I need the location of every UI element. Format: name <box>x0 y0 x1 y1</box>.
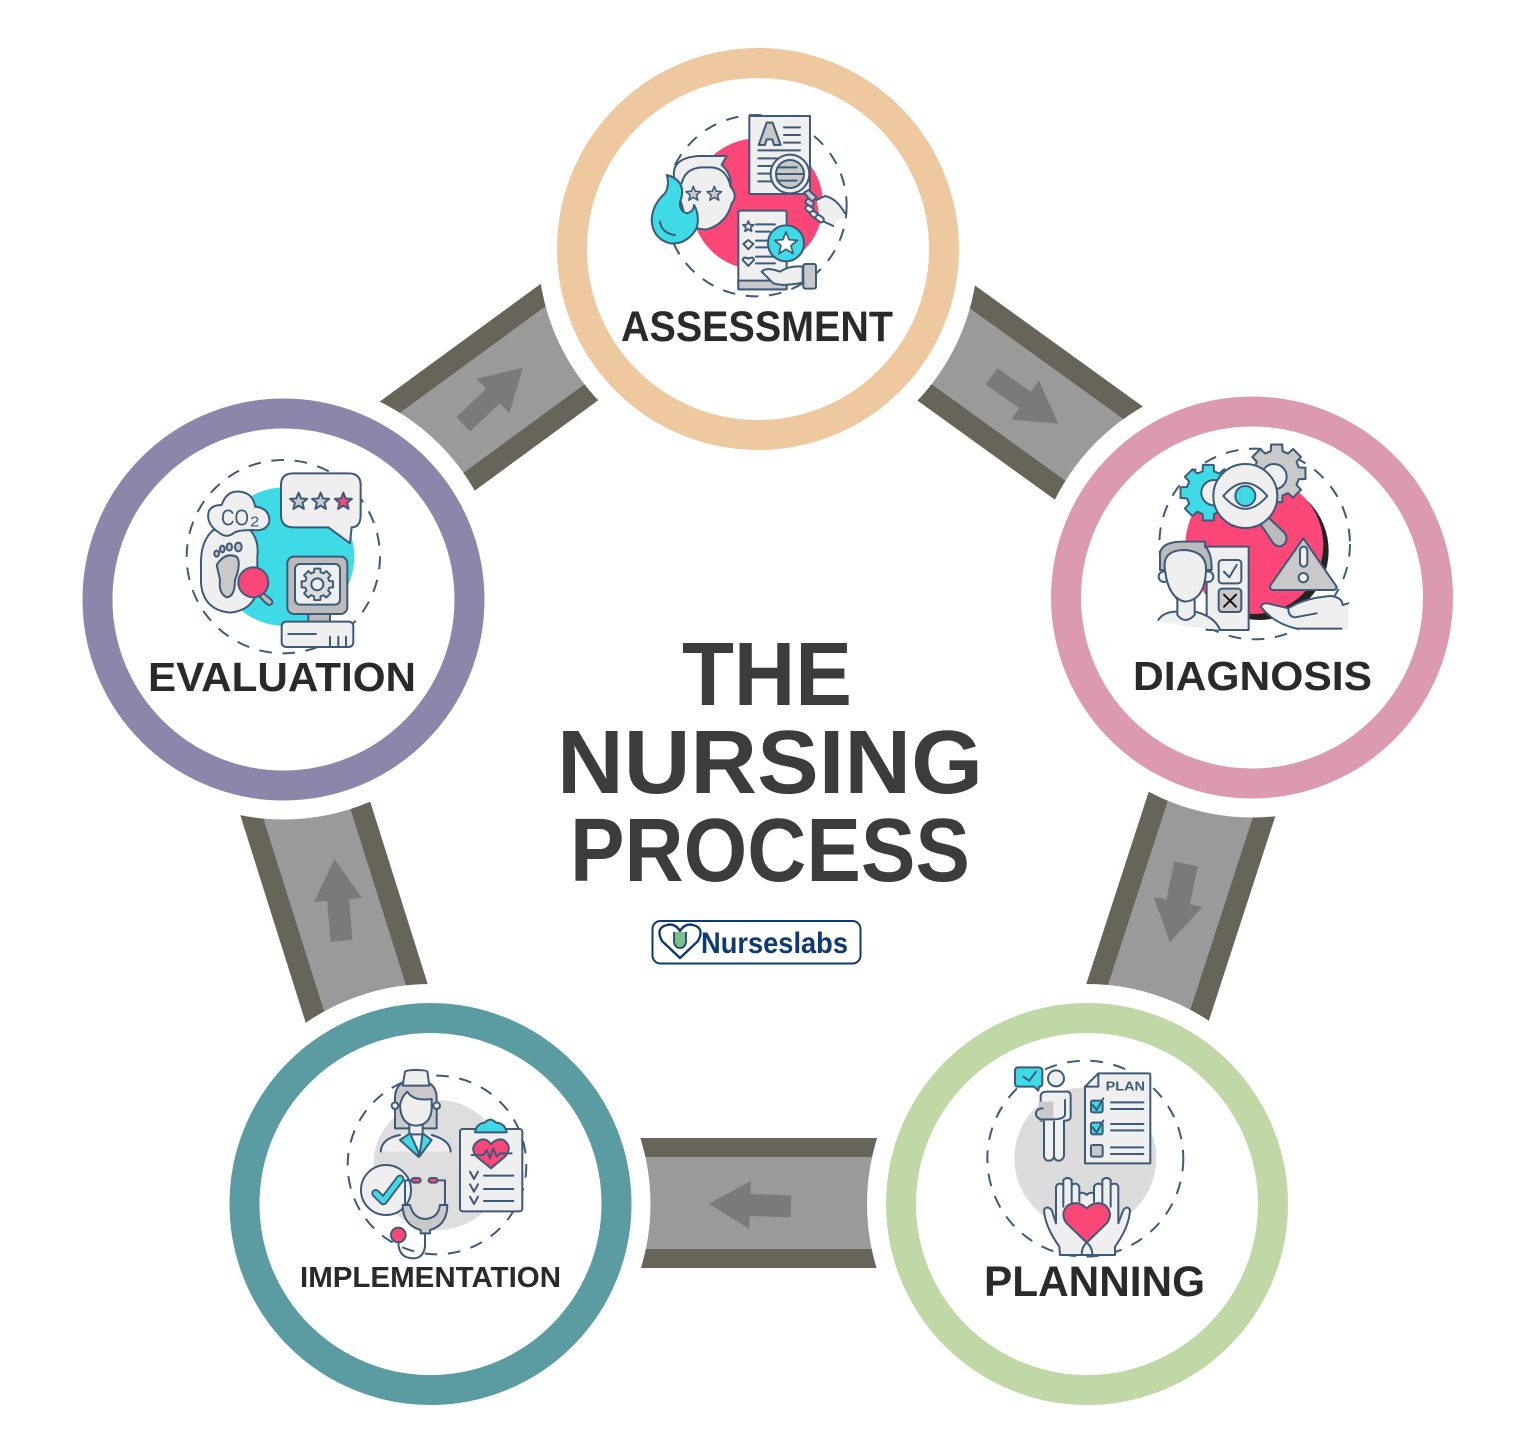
panel: implementation circle <box>210 984 650 1424</box>
panel: planning circle <box>867 984 1307 1424</box>
label: evaluation: EVALUATION <box>148 654 416 700</box>
icon: assessment <box>652 115 847 296</box>
title: PROCESS <box>570 801 970 901</box>
title: NURSING <box>557 713 983 813</box>
title <box>557 625 983 901</box>
logo: Nurseslabs <box>652 921 860 964</box>
icon: evaluation <box>187 460 380 653</box>
panel: assessment circle <box>538 29 978 469</box>
icon: diagnosis <box>1158 445 1350 639</box>
connector: evaluation to assessment <box>363 272 632 517</box>
icon: planning <box>987 1061 1183 1257</box>
title: THE <box>682 625 852 725</box>
connector: diagnosis to planning <box>1082 769 1278 1036</box>
connector: planning to implementation <box>639 1138 879 1268</box>
connector: implementation to evaluation <box>239 772 433 1040</box>
label: implementation: IMPLEMENTATION <box>300 1262 561 1294</box>
arrow: diagnosis to planning <box>1145 859 1211 947</box>
arrow: implementation to evaluation <box>311 857 365 943</box>
arrow: planning to implementation <box>708 1180 792 1230</box>
arrow: evaluation to assessment <box>447 350 539 442</box>
label: CO2: CO <box>221 504 249 530</box>
label: plan sheet heading: PLAN <box>1106 1079 1145 1094</box>
label: CO2: 2 <box>250 514 259 530</box>
arrow: assessment to diagnosis <box>978 357 1072 443</box>
icon: implementation <box>348 1070 526 1258</box>
logo: Nurseslabs: Nurseslabs <box>701 927 848 960</box>
connector: assessment to diagnosis <box>888 276 1157 520</box>
label: diagnosis: DIAGNOSIS <box>1133 653 1372 699</box>
panel: diagnosis circle <box>1032 378 1472 818</box>
label: assessment: ASSESSMENT <box>621 303 893 351</box>
label: planning: PLANNING <box>984 1258 1205 1306</box>
panel: evaluation circle <box>64 380 504 820</box>
